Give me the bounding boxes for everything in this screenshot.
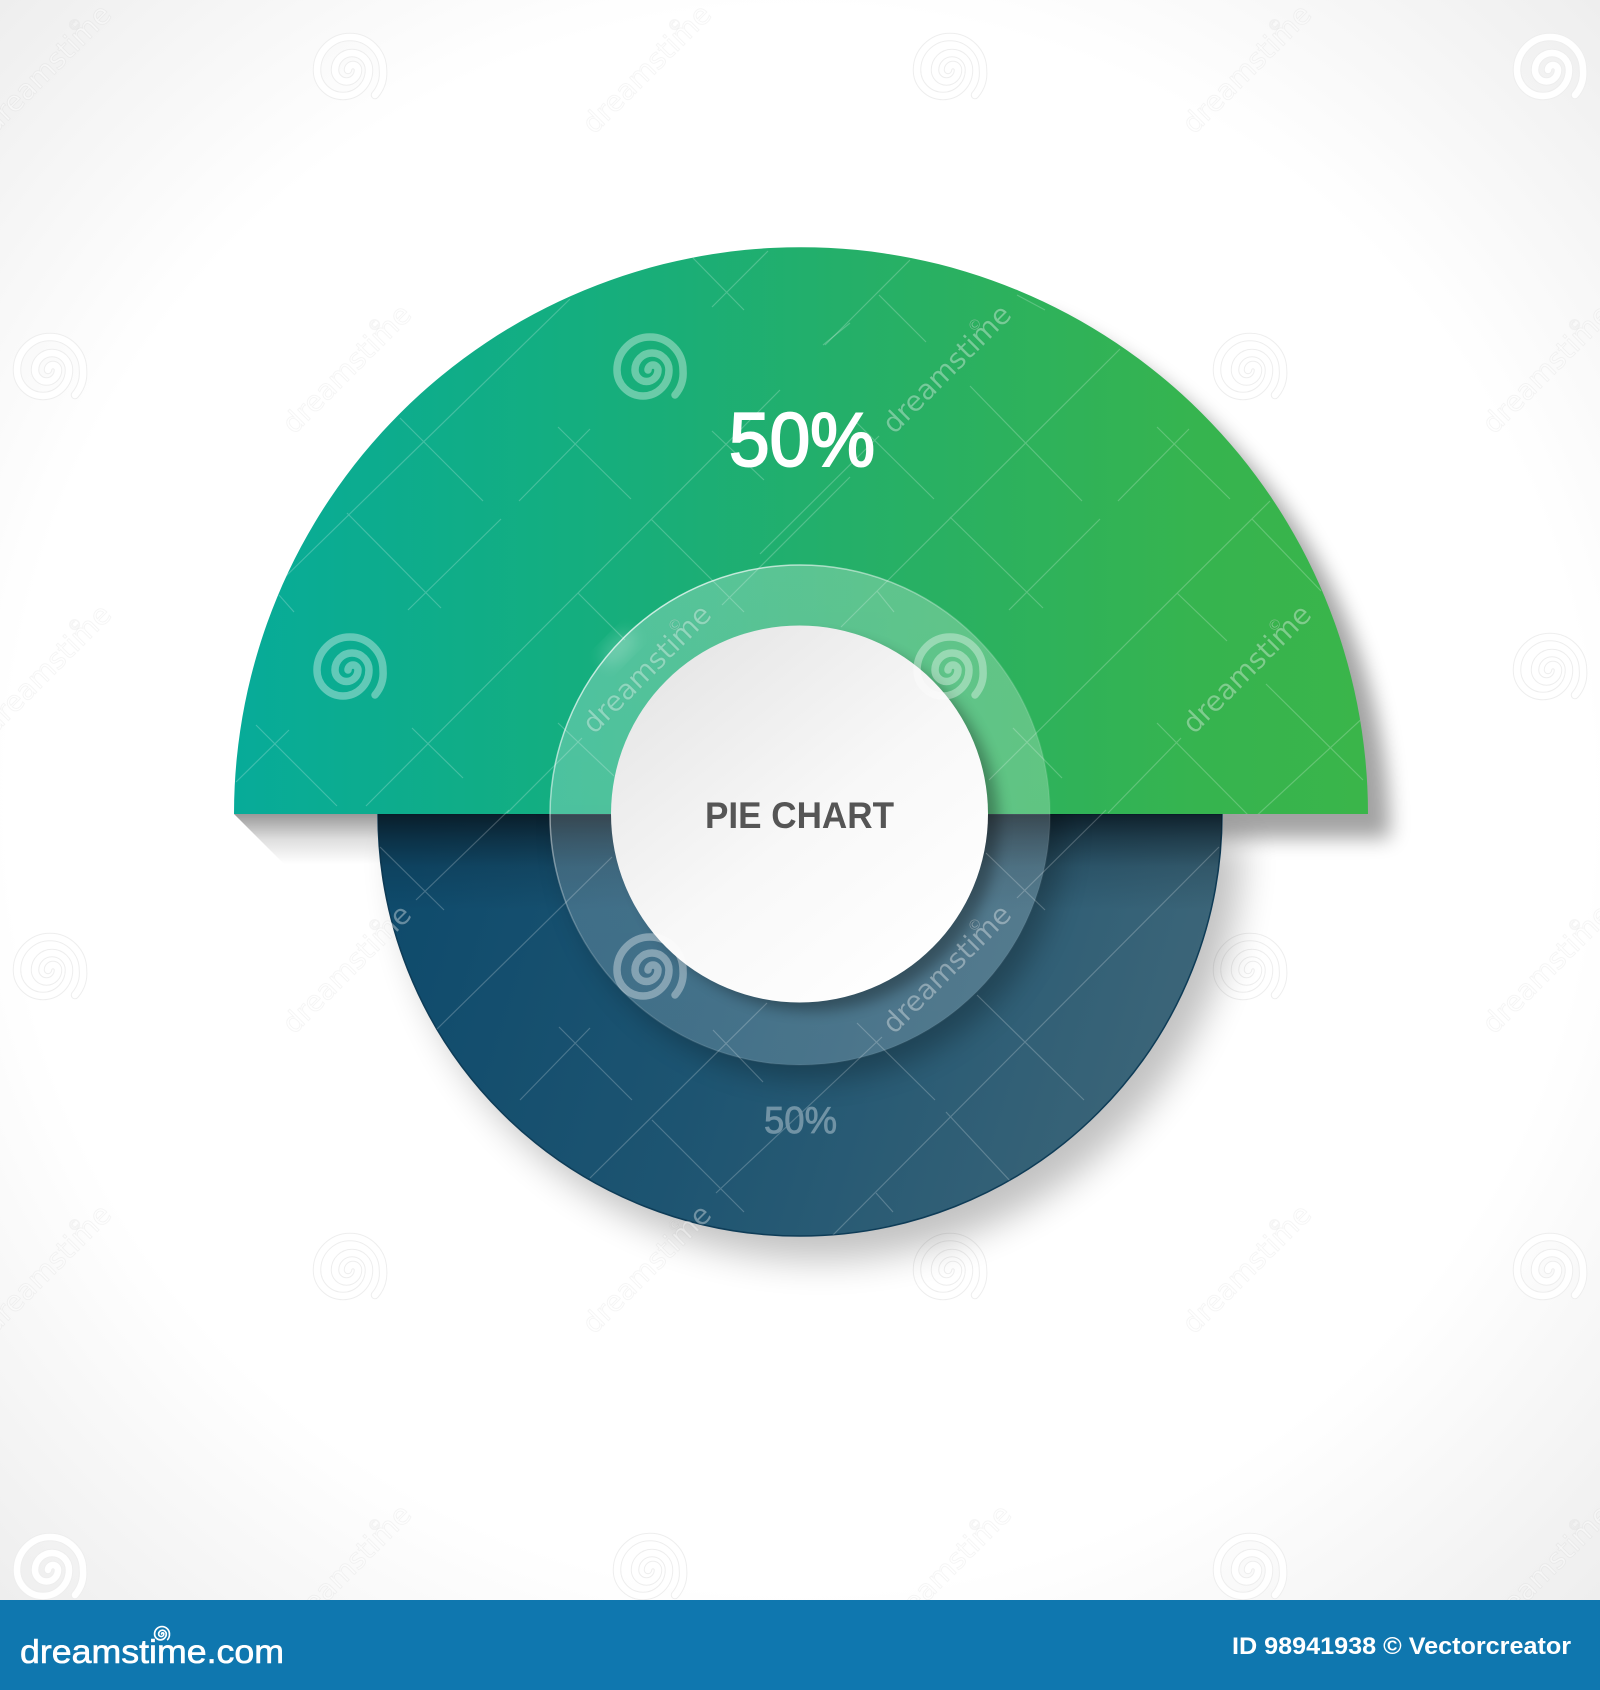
- watermark wordmarks: dreamstime: [276, 298, 418, 440]
- watermark wordmarks: ©: [1565, 1515, 1586, 1536]
- centre plate: [611, 626, 988, 1002]
- watermark wordmarks: ©: [965, 315, 986, 336]
- watermark wordmarks: ©: [1265, 615, 1286, 636]
- watermark wordmarks: dreamstime: [576, 598, 718, 740]
- ring highlight: [594, 624, 642, 672]
- watermark wordmarks: ©: [665, 15, 686, 36]
- watermark wordmarks: ©: [1265, 15, 1286, 36]
- watermark wordmarks: dreamstime: [576, 1198, 718, 1340]
- watermark wordmarks: ©: [1265, 1215, 1286, 1236]
- value label: lower slice 50%: 50%: [764, 1100, 837, 1142]
- footer credit: ID 98941938 © Vectorcreator: [1232, 1633, 1571, 1660]
- watermark lines: [236, 251, 1380, 1237]
- panel: lower slice shadow: [398, 838, 1242, 1260]
- watermark wordmarks: ©: [965, 915, 986, 936]
- pie slice: lower 50% (blue): [378, 814, 1222, 1236]
- panel: upper slice arc shadow: [1058, 308, 1402, 851]
- watermark wordmarks: dreamstime: [276, 1498, 418, 1640]
- centre title: PIE CHART: [705, 795, 894, 836]
- watermark wordmarks: dreamstime: [876, 1498, 1018, 1640]
- watermark wordmarks: dreamstime: [876, 898, 1018, 1040]
- watermark wordmarks: dreamstime: [276, 898, 418, 1040]
- centre plate shadow: [625, 637, 999, 1011]
- watermark wordmarks: ©: [365, 915, 386, 936]
- watermark wordmarks: dreamstime: [876, 298, 1018, 440]
- value label: upper slice 50%: 50%: [729, 398, 875, 483]
- watermark wordmarks: ©: [65, 15, 86, 36]
- footer logo spiral: [155, 1627, 169, 1640]
- panel: upper slice chord shadow: [234, 814, 1000, 864]
- watermark wordmarks: ©: [665, 615, 686, 636]
- pie slice: upper 50% (green): [234, 247, 1368, 814]
- watermark wordmarks: dreamstime: [576, 0, 718, 140]
- watermark wordmarks: ©: [665, 1215, 686, 1236]
- watermark wordmarks: dreamstime: [1176, 0, 1318, 140]
- watermark wordmarks: ©: [65, 615, 86, 636]
- watermark wordmarks: dreamstime: [1176, 1198, 1318, 1340]
- watermark wordmarks: ©: [365, 315, 386, 336]
- footer bar: [0, 1600, 1600, 1690]
- watermark wordmarks: ©: [1565, 915, 1586, 936]
- watermark wordmarks: dreamstime: [1176, 598, 1318, 740]
- watermark wordmarks: ©: [965, 1515, 986, 1536]
- watermark spirals on chart: [317, 337, 983, 996]
- watermark wordmarks: ©: [365, 1515, 386, 1536]
- glass ring: [550, 565, 1050, 1065]
- footer logo wordmark: dreamstime.com: [20, 1633, 284, 1670]
- watermark wordmarks: ©: [1565, 315, 1586, 336]
- glass ring shadow: [575, 814, 1068, 1088]
- watermark wordmarks: ©: [65, 1215, 86, 1236]
